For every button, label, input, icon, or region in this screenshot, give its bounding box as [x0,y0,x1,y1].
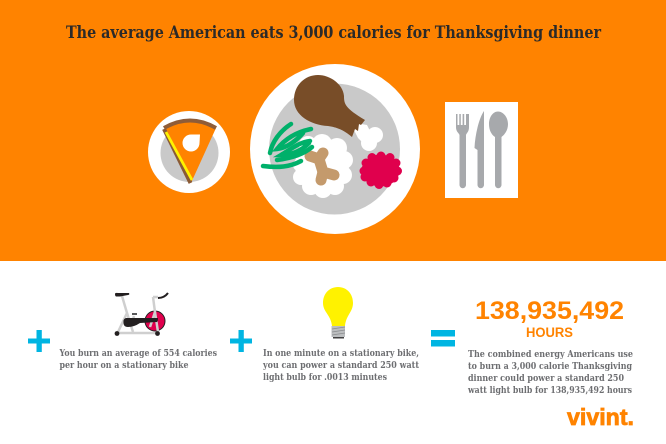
logo: vivint: vivint. [567,404,634,430]
text: combined energy: The combined energy Americans use [468,349,633,360]
text: bike calories: per hour on a stationary bike [60,360,189,371]
text: light bulb minutes: light bulb for .0013 minutes [263,372,387,383]
gravy [310,153,334,180]
orange header panel [0,0,666,261]
text: combined energy: dinner could power a standard 250 [468,373,624,384]
knife [474,111,484,188]
text: light bulb minutes [262,348,420,383]
fork [456,114,469,188]
text: combined energy: to burn a 3,000 calorie Thanksgiving [468,361,632,372]
turkey bone [350,122,383,151]
icon: dinner plate [250,64,420,234]
text: combined energy [467,349,633,396]
text: bike calories: You burn an average of 554 calories [59,348,217,359]
icon: plus 1 [28,330,50,352]
hours label: HOURS [526,325,573,340]
icon: light bulb [323,287,353,338]
green beans [263,124,312,167]
icon: stationary bike [115,293,168,336]
title: The average American eats 3,000 calories for Thanksgiving dinner [66,23,601,42]
text: combined energy: watt light bulb for 138,935,492 hours [467,385,632,396]
big number: 138,935,492 [475,297,624,325]
spoon [489,112,508,188]
text: light bulb minutes: you can power a standard 250 watt [262,360,420,371]
icon: pie slice [148,111,230,193]
turkey drumstick [294,75,365,137]
cranberry sauce [360,152,402,189]
text: light bulb minutes: In one minute on a stationary bike, [263,348,419,359]
icon: equals [431,330,455,346]
mashed potatoes [293,134,353,198]
icon: plus 2 [230,330,252,352]
text: bike calories [59,348,217,371]
card: cutlery [445,102,518,198]
